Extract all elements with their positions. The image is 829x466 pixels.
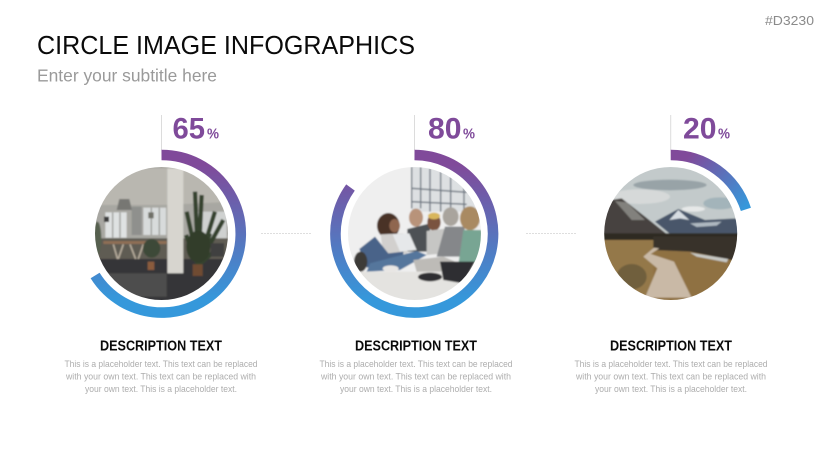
percentage value: 80 [428, 112, 462, 146]
heading: DESCRIPTION TEXT [610, 338, 732, 354]
title: CIRCLE IMAGE INFOGRAPHICS [37, 30, 415, 60]
body text: your own text. This is a placeholder text. [595, 384, 747, 394]
panel: 80 percent [335, 112, 493, 313]
body text: with your own text. This text can be replaced with [320, 372, 511, 382]
heading: DESCRIPTION TEXT [355, 338, 477, 354]
leader line [414, 115, 416, 150]
photo: team on floor [348, 167, 481, 300]
subtitle: Enter your subtitle here [37, 66, 217, 86]
body text: with your own text. This text can be replaced with [65, 372, 256, 382]
progress ring [671, 155, 746, 209]
body text: This is a placeholder text. This text can be replaced [320, 359, 512, 369]
connector [261, 232, 311, 234]
percentage value: 20 [683, 112, 716, 146]
body text: your own text. This is a placeholder text. [85, 384, 237, 394]
progress ring [95, 155, 241, 313]
progress ring [335, 155, 493, 313]
description 2 [320, 338, 512, 394]
percentage value: % [207, 126, 219, 142]
description 3 [574, 338, 768, 394]
connector [526, 232, 576, 234]
description 1 [64, 338, 258, 394]
percentage value: 65 [172, 112, 205, 146]
photo: mountain trail [604, 167, 738, 300]
panel: 20 percent [600, 112, 746, 305]
heading: DESCRIPTION TEXT [100, 338, 222, 354]
document code: #D3230 [765, 14, 814, 28]
percentage value: % [718, 126, 730, 142]
infographic slide [38, 16, 814, 394]
leader line [670, 115, 672, 150]
photo: office [95, 167, 228, 300]
percentage value: % [463, 126, 475, 142]
body text: with your own text. This text can be replaced with [575, 372, 766, 382]
panel: 65 percent [90, 112, 241, 313]
leader line [160, 115, 162, 150]
body text: your own text. This is a placeholder text. [340, 384, 492, 394]
body text: This is a placeholder text. This text can be replaced [574, 359, 768, 369]
body text: This is a placeholder text. This text can be replaced [64, 359, 258, 369]
